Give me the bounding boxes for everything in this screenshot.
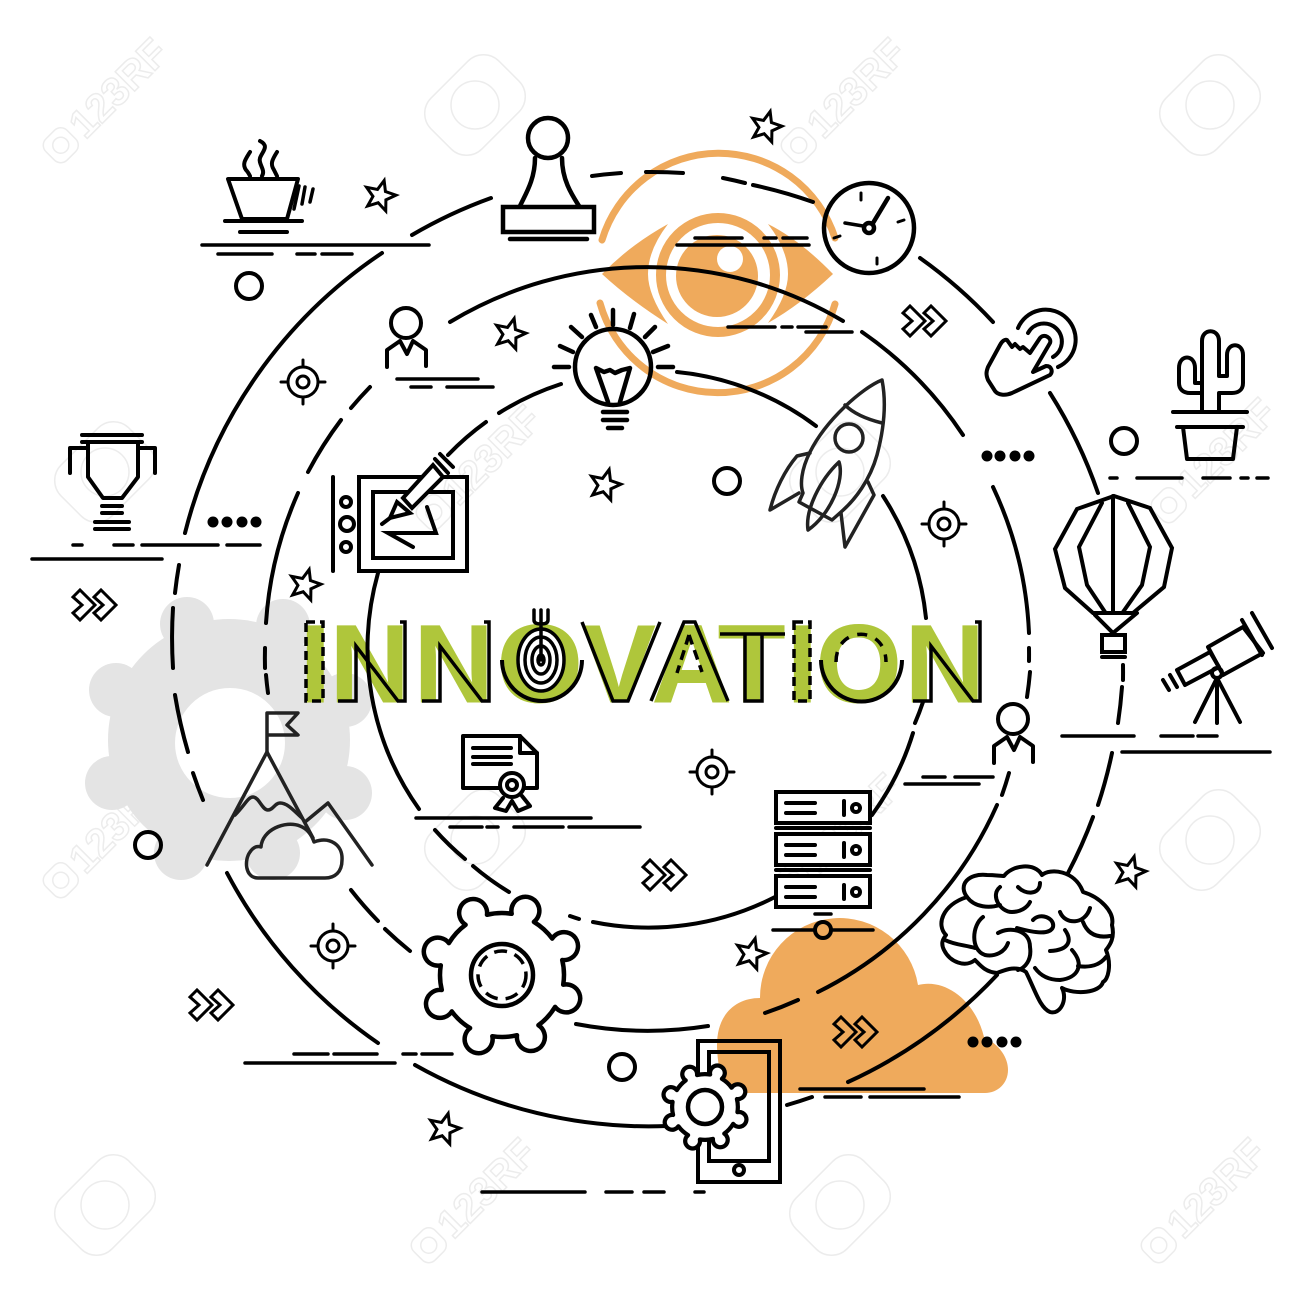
- icon: target on letter O: [518, 610, 564, 691]
- icon: coffee cup: [225, 141, 313, 232]
- icon: cactus in pot: [1173, 331, 1247, 459]
- orange cloud: [717, 918, 1008, 1093]
- outer dashed ring: [172, 172, 1123, 1126]
- icon: mountain with flag: [207, 713, 372, 878]
- small circles: [135, 273, 1137, 1080]
- icon: telescope: [1163, 613, 1272, 723]
- icon: rocket: [770, 380, 884, 547]
- horizontal accent lines: [32, 238, 1270, 1192]
- crosshair targets: [281, 360, 966, 968]
- icon: light bulb: [554, 310, 673, 428]
- icon: small gear: [664, 1066, 746, 1148]
- four-dot ellipses: [208, 450, 1034, 1048]
- icon: server stack: [776, 792, 870, 938]
- middle dashed ring: [265, 267, 1030, 1031]
- icon: clock: [824, 183, 914, 273]
- small stars: [287, 108, 1149, 1145]
- icon: smartphone: [698, 1041, 780, 1182]
- icon: trophy: [70, 435, 155, 529]
- icon: large gear: [424, 897, 580, 1053]
- icon: certificate: [463, 736, 537, 811]
- icon: stamp: [503, 118, 594, 239]
- icon: brain: [941, 866, 1113, 1012]
- inner dashed ring: [368, 372, 926, 928]
- grey background gear: [85, 597, 372, 880]
- double chevrons: [73, 306, 946, 1047]
- icon: tapping hand: [986, 310, 1076, 395]
- icon: drawing tablet: [333, 454, 467, 571]
- title: INNOVATION: INNOVATION: [300, 603, 984, 726]
- icon: person left: [387, 308, 426, 367]
- orange eye: [600, 153, 835, 393]
- icon: hot air balloon: [1055, 496, 1172, 657]
- icon: person right: [994, 704, 1033, 763]
